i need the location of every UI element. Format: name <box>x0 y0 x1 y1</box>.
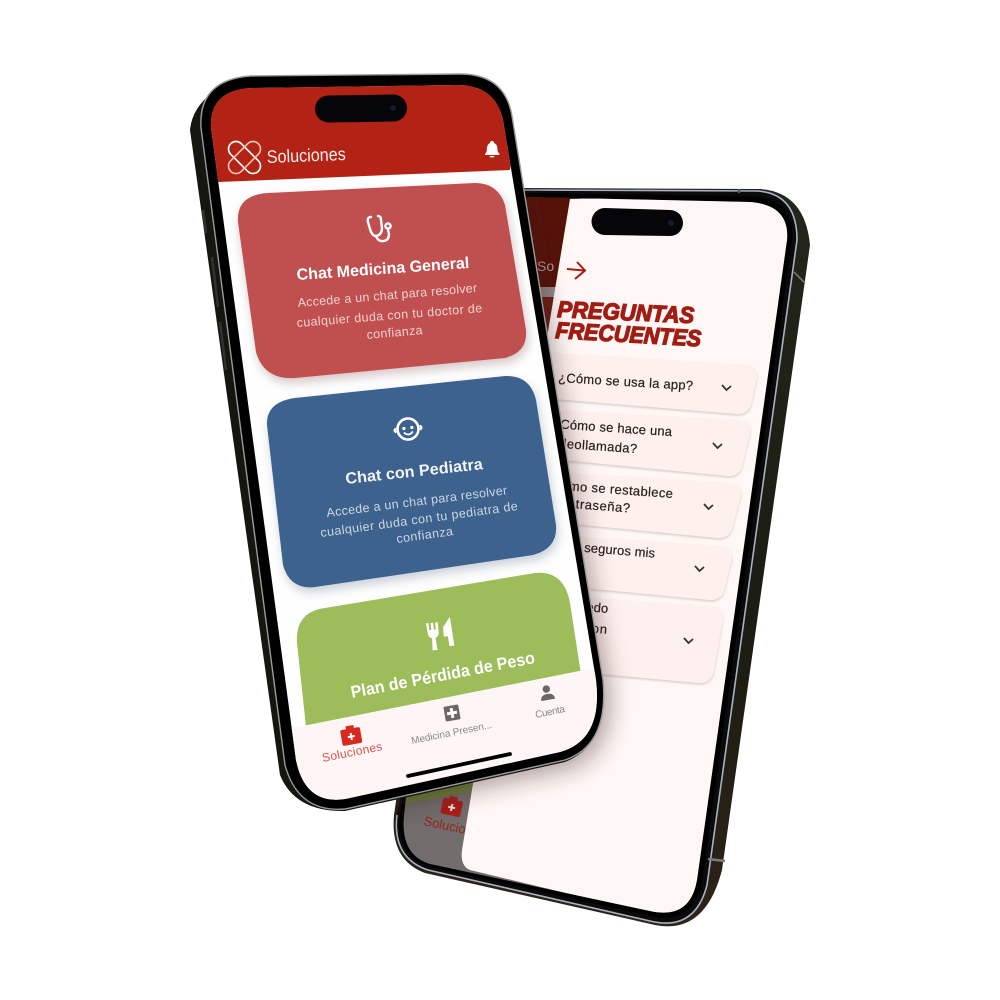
question line 1: ¿Cómo se hace una <box>552 416 673 439</box>
card title: Chat Medicina General <box>296 255 470 284</box>
island camera <box>668 220 674 226</box>
face outline <box>396 417 420 441</box>
side buttons <box>203 210 226 370</box>
card background <box>297 573 585 745</box>
back phone dynamic island <box>592 208 683 236</box>
phone: front Soluciones screen <box>190 74 610 811</box>
chevron <box>704 504 713 509</box>
bottom navigation bar <box>280 665 610 810</box>
item card shadow <box>558 372 758 416</box>
item card shadow <box>603 613 724 686</box>
dimmed app background <box>404 197 788 913</box>
back phone body <box>394 188 810 926</box>
front phone side frame <box>190 74 604 811</box>
heading line 1: PREGUNTAS <box>557 296 695 328</box>
nav icon: soluciones <box>340 724 362 746</box>
heading line 2: FRECUENTES <box>555 317 703 351</box>
icon: fork and knife <box>426 617 455 651</box>
soft shadow shape <box>201 74 609 817</box>
island pill <box>315 94 407 123</box>
question: ¿Son seguros mis <box>549 537 656 561</box>
island pill <box>592 208 683 236</box>
item card <box>490 592 723 683</box>
description line 2: cualquier duda con tu pediatra de <box>320 499 519 540</box>
card shadow <box>240 188 528 383</box>
header bar <box>200 80 520 184</box>
back phone metal rim <box>396 190 797 923</box>
description line 3: confianza <box>395 524 454 546</box>
mute switch <box>203 210 206 233</box>
dimmed green card <box>405 782 474 804</box>
top band <box>738 189 740 193</box>
nav icon: medicina <box>443 704 461 722</box>
logo band 1 <box>225 138 264 177</box>
fork <box>426 622 441 651</box>
item card <box>581 538 732 600</box>
icon: bell <box>485 141 500 158</box>
ears <box>394 425 422 433</box>
description line 2: cualquier duda con tu doctor de <box>296 301 483 330</box>
card background <box>267 376 556 587</box>
phone: back FAQ screen <box>394 188 810 926</box>
question line 2: mi contraseña? <box>534 493 631 516</box>
item card shadow <box>589 553 733 602</box>
smile <box>404 431 413 435</box>
FAQ item 4 <box>584 545 733 602</box>
back phone black bezel <box>400 193 792 918</box>
card: chat medicina general <box>238 183 528 383</box>
card background <box>238 183 526 378</box>
card shadow <box>269 381 558 592</box>
question line 1: ¿Puedo <box>562 597 609 616</box>
chevron <box>722 385 731 390</box>
card description <box>296 281 483 342</box>
heading: preguntas frecuentes <box>554 300 702 347</box>
chevron <box>695 566 704 571</box>
upper right band <box>794 272 805 283</box>
item card <box>551 354 757 414</box>
item card <box>560 412 750 476</box>
description line 3: confianza <box>366 323 423 342</box>
FAQ page <box>462 195 810 930</box>
page background <box>462 195 810 930</box>
dimmed app header <box>526 197 580 287</box>
back screen dimmed app <box>404 197 788 913</box>
FAQ item 3 <box>572 484 742 540</box>
rim antenna bands <box>708 189 805 861</box>
FAQ item 2 <box>562 420 751 478</box>
home indicator <box>408 754 510 776</box>
knife <box>442 617 454 647</box>
screen background <box>200 80 610 810</box>
front screen <box>200 80 610 810</box>
description line 1: Accede a un chat para resolver <box>326 483 508 520</box>
card description <box>320 483 519 546</box>
card title: Plan de Pérdida de Peso <box>349 648 536 702</box>
card: plan de perdida de peso <box>297 573 585 745</box>
chevron <box>684 638 693 643</box>
eyes <box>402 426 414 430</box>
nav label: soluciones: Soluciones <box>321 739 383 765</box>
question line 2: hablar con <box>539 616 608 637</box>
description line 1: Accede a un chat para resolver <box>297 281 478 310</box>
dimmed nav label: Soluciones <box>422 813 488 841</box>
header title: Soluciones <box>266 144 346 167</box>
item card <box>570 474 741 538</box>
question line 2: videollamada? <box>549 435 638 456</box>
nav background <box>280 665 610 810</box>
icon: baby face <box>393 417 423 441</box>
dimmed icon: medical case <box>441 795 463 817</box>
FAQ item 1 <box>558 370 758 416</box>
item card shadow <box>578 490 742 540</box>
card: chat con pediatra <box>267 376 558 592</box>
logo: crossed plasters <box>225 138 264 177</box>
chevron <box>713 443 722 448</box>
back arrow <box>567 262 585 279</box>
shadow from front phone <box>201 74 609 817</box>
lower right band <box>708 859 725 861</box>
nav label: cuenta: Cuenta <box>534 704 566 721</box>
question: ¿Cómo se usa la app? <box>558 370 693 393</box>
nav label: medicina: Medicina Presen... <box>410 720 493 747</box>
question line 1: ¿Cómo se restablece <box>543 477 674 501</box>
volume up <box>212 257 218 307</box>
island camera <box>390 105 396 111</box>
nav icon: cuenta <box>539 684 555 701</box>
item card shadow <box>568 427 751 478</box>
dimmed divider strip <box>540 287 556 297</box>
dimmed card <box>542 297 554 334</box>
volume down <box>220 322 226 370</box>
dimmed header title: So <box>537 258 554 274</box>
FAQ item 5 <box>592 602 724 686</box>
icon: stethoscope <box>368 216 391 241</box>
front phone metal rim <box>201 74 604 809</box>
front phone dynamic island <box>315 94 407 123</box>
card title: Chat con Pediatra <box>345 456 484 488</box>
logo band 2 <box>225 138 264 177</box>
